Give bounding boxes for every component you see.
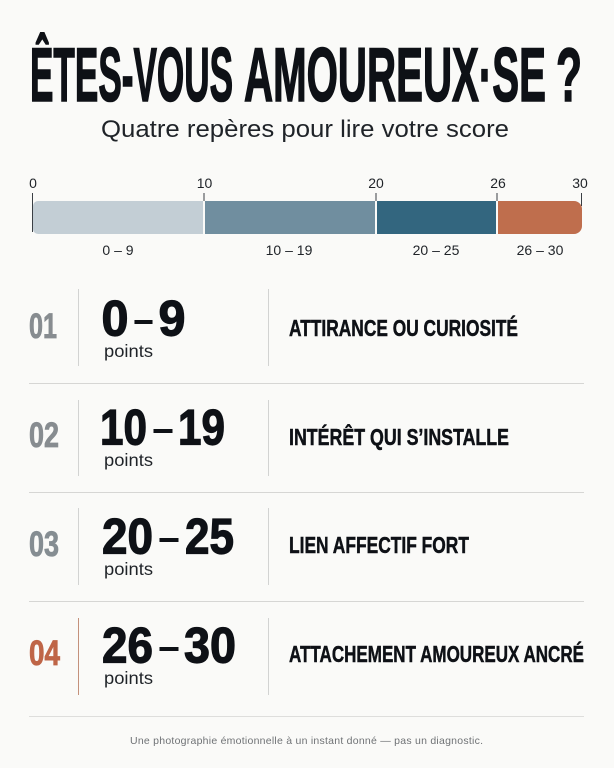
footer note: Une photographie émotionnelle à un instant donné — pas un diagnostic.	[130, 735, 483, 747]
segment 0-9	[33, 201, 203, 234]
number 01: 01	[29, 307, 57, 346]
range 10-19	[100, 400, 225, 456]
tick labels: 10	[197, 175, 212, 191]
tick marks	[32, 193, 582, 232]
tick labels: 26	[490, 175, 506, 191]
title: ÊTES-VOUS	[30, 32, 233, 118]
points: points	[104, 341, 153, 361]
number 03: 03	[29, 525, 59, 564]
range 26-30: –	[159, 631, 179, 664]
row 02	[29, 400, 509, 476]
range labels: 0 – 9	[102, 242, 134, 258]
range 26-30: 26	[102, 618, 153, 674]
range 20-25: 20	[102, 508, 153, 564]
number 02: 02	[29, 416, 59, 455]
range 0-9: 0	[102, 290, 128, 346]
row 01	[29, 289, 518, 366]
row 04	[29, 618, 584, 695]
label: LIEN AFFECTIF FORT	[289, 532, 469, 558]
number 04: 04	[29, 634, 60, 673]
range 10-19: –	[153, 413, 173, 446]
range 26-30: 30	[184, 618, 236, 674]
range 10-19: 10	[100, 400, 147, 456]
tick labels: 20	[368, 175, 384, 191]
range 0-9: –	[134, 304, 153, 337]
range 26-30	[102, 618, 236, 674]
tick labels: 30	[572, 175, 588, 191]
subtitle: Quatre repères pour lire votre score	[101, 116, 509, 143]
tick labels: 0	[29, 175, 37, 191]
title: ?	[556, 33, 582, 118]
segment 20-25	[377, 201, 496, 234]
tick labels	[29, 175, 588, 191]
range labels	[102, 242, 564, 258]
label: INTÉRÊT QUI S’INSTALLE	[289, 423, 509, 450]
points: points	[104, 450, 153, 470]
segment 10-19	[205, 201, 375, 234]
range 0-9	[102, 290, 186, 346]
score scale bar	[29, 175, 588, 258]
points: points	[104, 668, 153, 688]
segment 26-30	[498, 201, 582, 234]
range 10-19: 19	[178, 400, 225, 456]
range 20-25: –	[159, 522, 179, 555]
range labels: 10 – 19	[266, 242, 313, 258]
range labels: 20 – 25	[413, 242, 460, 258]
points: points	[104, 559, 153, 579]
row 03	[29, 508, 469, 585]
range labels: 26 – 30	[517, 242, 564, 258]
range 20-25: 25	[185, 508, 234, 564]
range 0-9: 9	[158, 290, 186, 346]
range 20-25	[102, 508, 234, 564]
label: ATTIRANCE OU CURIOSITÉ	[289, 314, 518, 341]
